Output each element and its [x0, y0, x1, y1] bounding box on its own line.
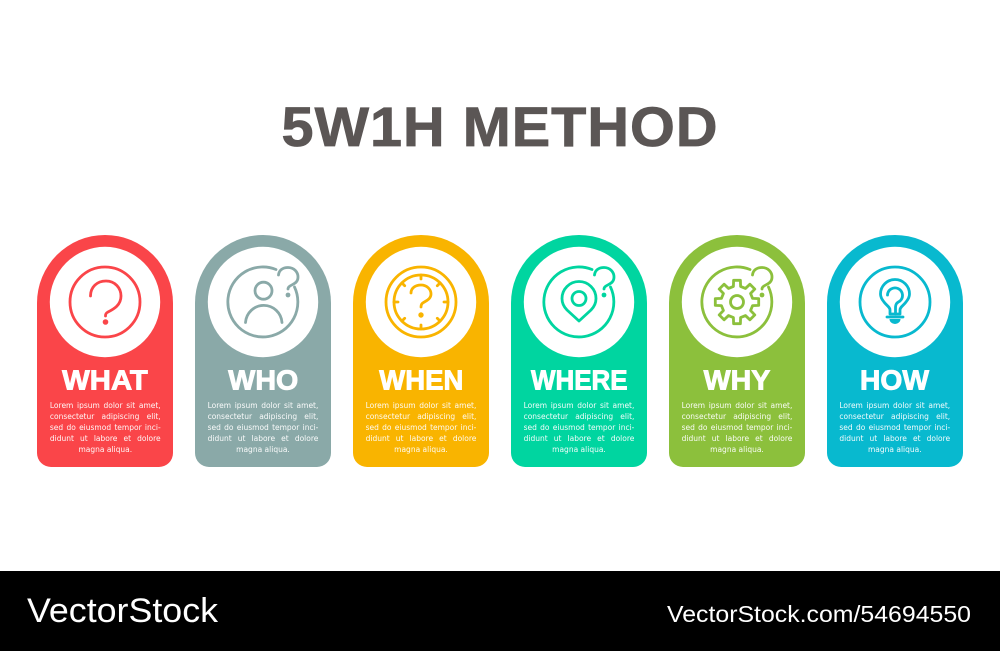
text block: sed do eiusmod tempor inci- [524, 422, 634, 432]
text block [524, 400, 634, 454]
text block: consectetur adipiscing elit, [208, 412, 318, 420]
panel: what [37, 235, 173, 467]
heading: WHERE: WHERE [531, 364, 628, 395]
heading: WHO: WHO [228, 364, 298, 395]
text block: Lorem ipsum dolor sit amet, [839, 400, 950, 410]
icon: light bulb with question mark [840, 246, 950, 358]
icon: gear with question mark [682, 246, 792, 358]
panel: where [511, 235, 647, 467]
text block: Lorem ipsum dolor sit amet, [366, 400, 476, 410]
text block: sed do eiusmod tempor inci- [208, 422, 318, 432]
text block: consectetur adipiscing elit, [682, 412, 792, 420]
text block: consectetur adipiscing elit, [524, 412, 634, 420]
heading: WHAT: WHAT [62, 364, 148, 395]
text block [839, 400, 950, 454]
text block: didunt ut labore et dolore [839, 434, 950, 442]
text block: magna aliqua. [552, 444, 606, 454]
text block: magna aliqua. [236, 444, 290, 454]
footer image id: VectorStock.com/54694550 [667, 601, 971, 627]
icon: person with question mark [208, 246, 318, 358]
footer logo: VectorStock [27, 592, 219, 630]
text block [208, 400, 318, 454]
text block: didunt ut labore et dolore [682, 434, 792, 442]
heading: WHY: WHY [704, 364, 771, 395]
panel: when [353, 235, 489, 467]
icon: clock with question mark [366, 246, 476, 358]
text block: Lorem ipsum dolor sit amet, [50, 400, 161, 410]
text block: magna aliqua. [710, 444, 764, 454]
text block: sed do eiusmod tempor inci- [682, 422, 792, 432]
panel: how [827, 235, 963, 467]
text block: didunt ut labore et dolore [50, 434, 161, 442]
panel: who [195, 235, 331, 467]
panel: why [669, 235, 805, 467]
text block: Lorem ipsum dolor sit amet, [208, 400, 318, 410]
heading: HOW: HOW [860, 364, 929, 395]
text block: consectetur adipiscing elit, [839, 412, 950, 420]
text block: magna aliqua. [78, 444, 132, 454]
text block: Lorem ipsum dolor sit amet, [524, 400, 634, 410]
text block: didunt ut labore et dolore [366, 434, 476, 442]
text block: consectetur adipiscing elit, [50, 412, 161, 420]
text block: magna aliqua. [394, 444, 448, 454]
text block: sed do eiusmod tempor inci- [366, 422, 476, 432]
text block: sed do eiusmod tempor inci- [50, 422, 161, 432]
text block: Lorem ipsum dolor sit amet, [682, 400, 792, 410]
icon: location pin with question mark [524, 246, 634, 358]
text block: didunt ut labore et dolore [524, 434, 634, 442]
text block [366, 400, 476, 454]
text block: didunt ut labore et dolore [208, 434, 318, 442]
title: 5W1H METHOD [282, 95, 718, 158]
heading: WHEN: WHEN [379, 364, 463, 395]
text block [50, 400, 161, 454]
footer bar [0, 571, 1000, 651]
text block [682, 400, 792, 454]
text block: magna aliqua. [868, 444, 922, 454]
text block: consectetur adipiscing elit, [366, 412, 476, 420]
icon: question mark [50, 246, 160, 358]
text block: sed do eiusmod tempor inci- [839, 422, 950, 432]
